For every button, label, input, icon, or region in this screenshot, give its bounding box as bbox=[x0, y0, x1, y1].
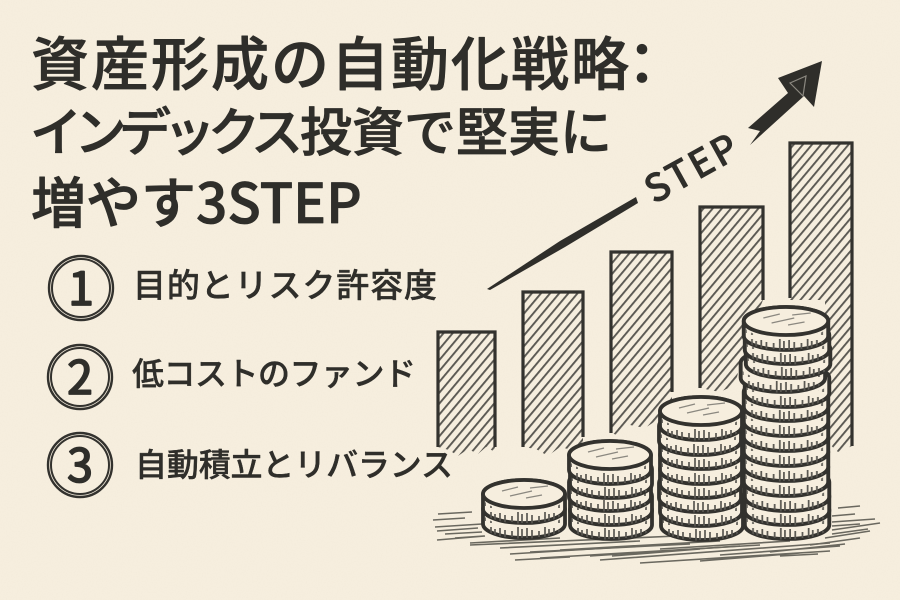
bar chart bbox=[438, 143, 852, 456]
bar 3 bbox=[611, 252, 672, 436]
arrow head bbox=[748, 61, 822, 145]
bar 5 bbox=[790, 143, 852, 452]
step 2 badge: 2 bbox=[67, 342, 93, 408]
coin stack 3 bbox=[659, 397, 743, 541]
step 3 label: 自動積立とリバランス bbox=[135, 440, 453, 486]
title bbox=[30, 18, 673, 239]
step 2 bbox=[48, 342, 416, 409]
growth arrow bbox=[487, 61, 822, 290]
arrow lower shaft bbox=[487, 197, 638, 290]
step 2 badge bbox=[48, 342, 112, 409]
step 1 bbox=[49, 253, 437, 320]
title line 1: ： bbox=[613, 18, 673, 102]
step 3 badge: 3 bbox=[67, 430, 93, 496]
step 2 label: 低コストのファンド bbox=[132, 349, 416, 395]
step 3 bbox=[48, 430, 453, 497]
title line 2: 投資で堅実に bbox=[300, 91, 612, 166]
step 1 label: 目的とリスク許容度 bbox=[133, 259, 437, 307]
title line 1: 資産形成の自動化戦略 bbox=[31, 18, 631, 102]
step 1 badge bbox=[49, 253, 113, 320]
step 1 badge: 1 bbox=[68, 253, 94, 319]
step list bbox=[48, 253, 453, 497]
coin stack 1 bbox=[483, 480, 565, 539]
step 3 badge bbox=[48, 430, 112, 497]
bar 1 bbox=[438, 332, 495, 456]
bar 2 bbox=[523, 292, 583, 456]
title line 2: インデックス bbox=[30, 91, 299, 166]
coin stack 4 bbox=[741, 307, 830, 540]
bar 4 bbox=[700, 207, 763, 392]
ground shadow hatching bbox=[433, 506, 880, 563]
coin stacks bbox=[483, 307, 830, 541]
title line 3: 増やす3STEP bbox=[31, 159, 362, 239]
coin stack 2 bbox=[569, 441, 652, 540]
STEP label: STEP bbox=[633, 118, 747, 214]
